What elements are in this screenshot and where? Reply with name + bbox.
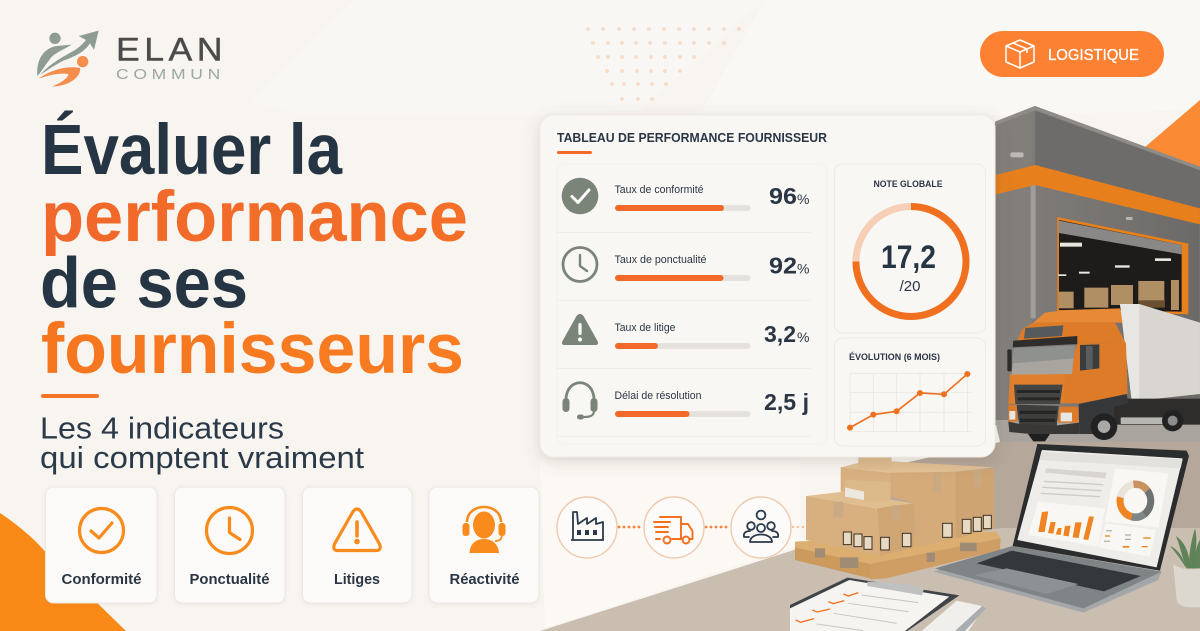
value: 92 bbox=[769, 252, 797, 278]
flow step: factory bbox=[557, 497, 617, 558]
gauge heading: NOTE GLOBALE bbox=[874, 179, 942, 190]
row: délai de résolution bbox=[562, 383, 809, 420]
logo icon bbox=[37, 31, 99, 87]
progress bar bbox=[615, 275, 750, 281]
keyboard bbox=[977, 551, 1141, 591]
table surface bbox=[540, 442, 1200, 631]
title line 1: Évaluer la bbox=[41, 111, 342, 190]
badge text: LOGISTIQUE bbox=[1048, 47, 1139, 64]
cab side bbox=[1063, 343, 1128, 403]
wheels bbox=[1091, 413, 1117, 440]
label: Taux de litige bbox=[614, 322, 676, 334]
plant in pot bbox=[1170, 528, 1200, 607]
label: conformité: Conformité bbox=[62, 572, 142, 588]
unit: % bbox=[797, 191, 809, 207]
icon: check circle bbox=[80, 508, 124, 552]
title divider bbox=[41, 394, 99, 398]
icon: headset bbox=[562, 383, 598, 420]
flow connector dots bbox=[618, 526, 804, 528]
gauge unit: /20 bbox=[900, 278, 920, 295]
decorative dot pattern bbox=[586, 27, 741, 101]
side window bbox=[1080, 344, 1099, 371]
screen donut chart bbox=[1120, 484, 1151, 517]
chassis bbox=[1113, 399, 1200, 425]
screen bbox=[1017, 450, 1183, 567]
screen text lines bbox=[1041, 481, 1103, 497]
truck bbox=[1007, 304, 1200, 441]
clipboard bbox=[790, 578, 986, 631]
upper grille bbox=[1014, 385, 1063, 404]
windshield bbox=[1012, 345, 1075, 375]
orange triangle behind warehouse bbox=[1145, 100, 1200, 175]
progress bar bbox=[615, 411, 750, 417]
subtitle line 1: Les 4 indicateurs bbox=[40, 412, 284, 446]
line chart bbox=[847, 371, 972, 432]
warehouse building bbox=[995, 106, 1200, 425]
subtitle bbox=[40, 412, 365, 475]
cab upper front bbox=[1017, 323, 1126, 344]
icon: clock bbox=[563, 248, 597, 282]
flow step: delivery truck bbox=[644, 497, 704, 558]
row: conformité bbox=[562, 178, 809, 214]
panel: supplier performance dashboard bbox=[540, 115, 995, 457]
bumper corners bbox=[1008, 405, 1017, 422]
card: ponctualité bbox=[174, 487, 285, 603]
flow: factory, truck, team bbox=[557, 497, 804, 558]
gauge value: 17,2 bbox=[881, 239, 936, 275]
value: 96 bbox=[769, 183, 797, 209]
paper bbox=[790, 580, 949, 631]
pen bbox=[955, 606, 986, 631]
screen bar chart bbox=[1038, 511, 1094, 540]
label: ponctualité: Ponctualité bbox=[190, 572, 270, 588]
icon: parcel bbox=[1006, 40, 1034, 68]
dashboard heading: TABLEAU DE PERFORMANCE FOURNISSEUR bbox=[557, 131, 827, 145]
pallet bbox=[795, 532, 1001, 579]
icon: warning triangle bbox=[334, 509, 380, 550]
parcels on pallet bbox=[795, 453, 1001, 579]
laptop bbox=[933, 444, 1189, 613]
label: litiges: Litiges bbox=[334, 572, 380, 588]
label: Taux de ponctualité bbox=[614, 254, 706, 266]
badge: logistique bbox=[980, 31, 1164, 77]
roof window bbox=[1024, 325, 1063, 339]
clip bbox=[867, 582, 924, 595]
ground bbox=[995, 420, 1200, 442]
heading underline bbox=[557, 151, 592, 154]
sun visor band bbox=[1013, 336, 1077, 347]
stacked boxes bbox=[841, 460, 994, 473]
row: litige bbox=[562, 314, 809, 349]
progress bar bbox=[615, 205, 750, 211]
spare sheet bbox=[922, 601, 985, 631]
label: réactivité: Réactivité bbox=[450, 572, 520, 588]
gauge ring bbox=[856, 206, 966, 316]
wheel arch bbox=[1079, 394, 1128, 434]
logo subtitle: COMMUN bbox=[116, 66, 225, 83]
unit: % bbox=[797, 329, 809, 345]
indicator cards bbox=[46, 487, 539, 603]
value: 3,2 bbox=[764, 321, 796, 347]
screen table bbox=[1098, 523, 1156, 557]
parcel tape and markings bbox=[833, 470, 981, 521]
screen panels bbox=[1045, 468, 1107, 478]
label: Taux de conformité bbox=[614, 184, 704, 196]
icon: check bbox=[562, 178, 598, 214]
title bbox=[40, 111, 468, 389]
orange corner shape bottom left bbox=[0, 513, 126, 631]
value: 2,5 j bbox=[764, 389, 809, 415]
subtitle line 2: qui comptent vraiment bbox=[40, 441, 365, 475]
title line 2: performance bbox=[41, 178, 468, 257]
plant pot bbox=[1173, 564, 1200, 607]
icon: clock bbox=[206, 508, 252, 554]
cab front panel bbox=[1008, 374, 1065, 404]
icon: warning bbox=[562, 314, 598, 345]
lower grille bbox=[1017, 405, 1059, 427]
logo bbox=[37, 31, 227, 87]
headlights bbox=[1009, 411, 1015, 420]
plant leaves bbox=[1170, 528, 1200, 568]
unit: % bbox=[797, 260, 809, 276]
logo wordmark: ELAN bbox=[116, 32, 227, 68]
title line 4: fournisseurs bbox=[41, 310, 464, 389]
checklist bbox=[796, 593, 858, 622]
laptop base bbox=[933, 548, 1162, 613]
panel: note globale bbox=[834, 164, 986, 333]
progress bar bbox=[615, 343, 750, 349]
bumper bbox=[1008, 422, 1079, 434]
title line 3: de ses bbox=[40, 244, 248, 324]
card: conformité bbox=[46, 487, 157, 603]
cab roof fairing bbox=[1033, 308, 1123, 323]
chart heading: ÉVOLUTION (6 MOIS) bbox=[849, 352, 940, 362]
card: litiges bbox=[302, 487, 412, 603]
board bbox=[790, 578, 959, 631]
screen bezel bbox=[1013, 444, 1189, 571]
trailer bbox=[1120, 304, 1200, 401]
icon: support agent bbox=[462, 507, 506, 553]
panel: évolution 6 mois bbox=[834, 338, 986, 446]
flow step: team bbox=[731, 497, 791, 558]
touchpad bbox=[974, 568, 1078, 594]
row: ponctualité bbox=[563, 248, 809, 282]
label: Délai de résolution bbox=[614, 390, 702, 402]
card: réactivité bbox=[429, 487, 539, 603]
